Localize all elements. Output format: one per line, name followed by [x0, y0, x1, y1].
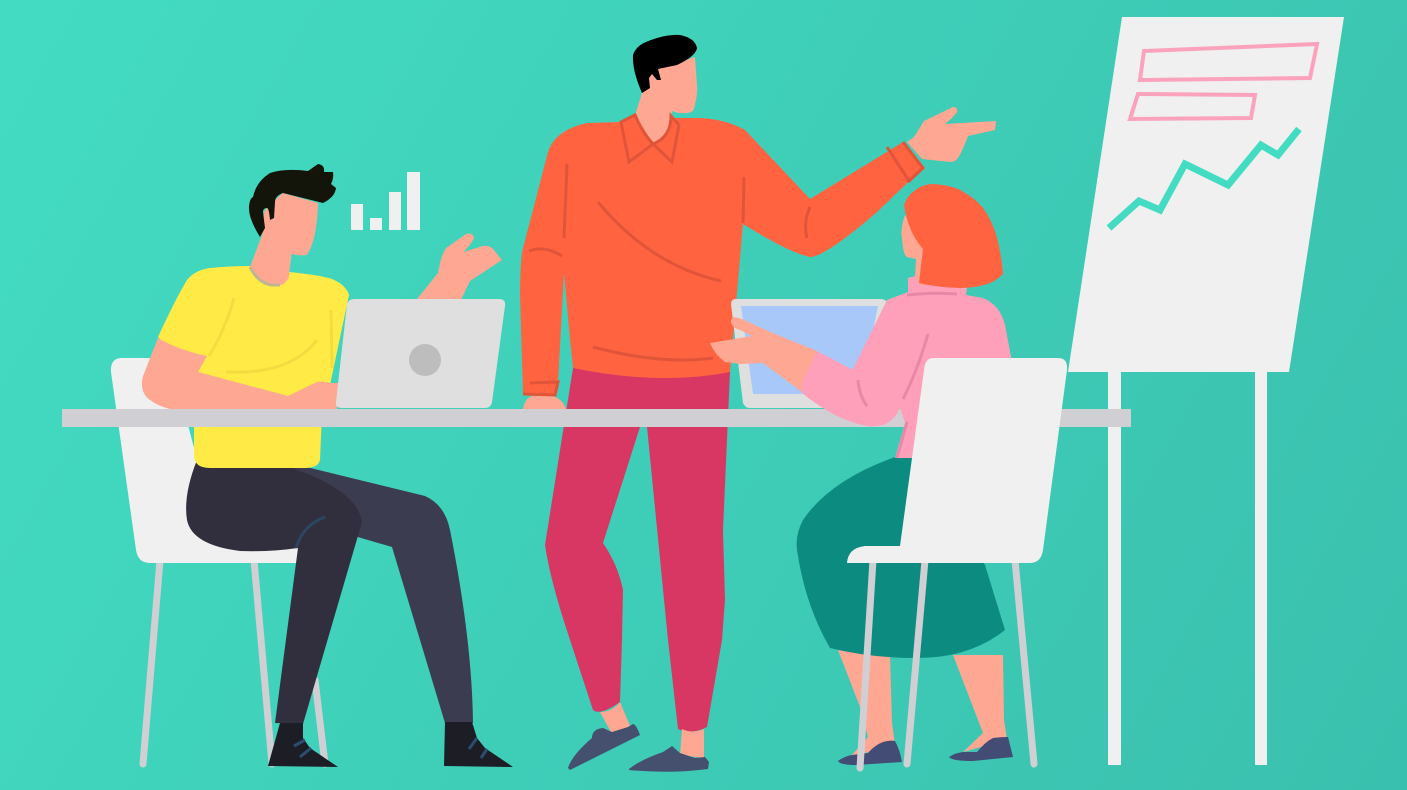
table [62, 409, 1131, 427]
blouse body [850, 276, 1012, 458]
far trouser leg [290, 463, 473, 723]
left laptop [336, 299, 505, 408]
neck and head [250, 225, 292, 285]
hair [904, 184, 1003, 288]
left chair [111, 358, 325, 764]
shirt [158, 266, 349, 468]
pants [545, 368, 730, 732]
right chair [847, 358, 1067, 768]
sweater [520, 118, 923, 395]
raised hand [417, 234, 502, 302]
arm and hand [710, 317, 817, 392]
sweater folds [523, 142, 923, 395]
hair [633, 35, 697, 93]
sleeve [802, 300, 925, 426]
man on left [142, 164, 513, 767]
hair [249, 164, 336, 237]
left shoe [568, 724, 640, 770]
skirt [797, 455, 1005, 658]
hand pointing [907, 107, 996, 162]
near trouser leg [186, 460, 362, 724]
neck and face [635, 57, 697, 144]
woman [710, 184, 1013, 765]
flipchart [1068, 17, 1344, 765]
hand on table [523, 396, 566, 409]
shoes [838, 741, 902, 765]
feet [600, 702, 630, 734]
bar chart icon [351, 172, 420, 230]
standing man [520, 35, 996, 772]
arm [142, 338, 339, 409]
right shoe [629, 746, 709, 772]
shoes [268, 723, 338, 767]
legs [838, 650, 895, 757]
face [901, 215, 935, 285]
right laptop [731, 299, 887, 408]
collar [621, 115, 679, 162]
blouse folds [858, 293, 957, 458]
